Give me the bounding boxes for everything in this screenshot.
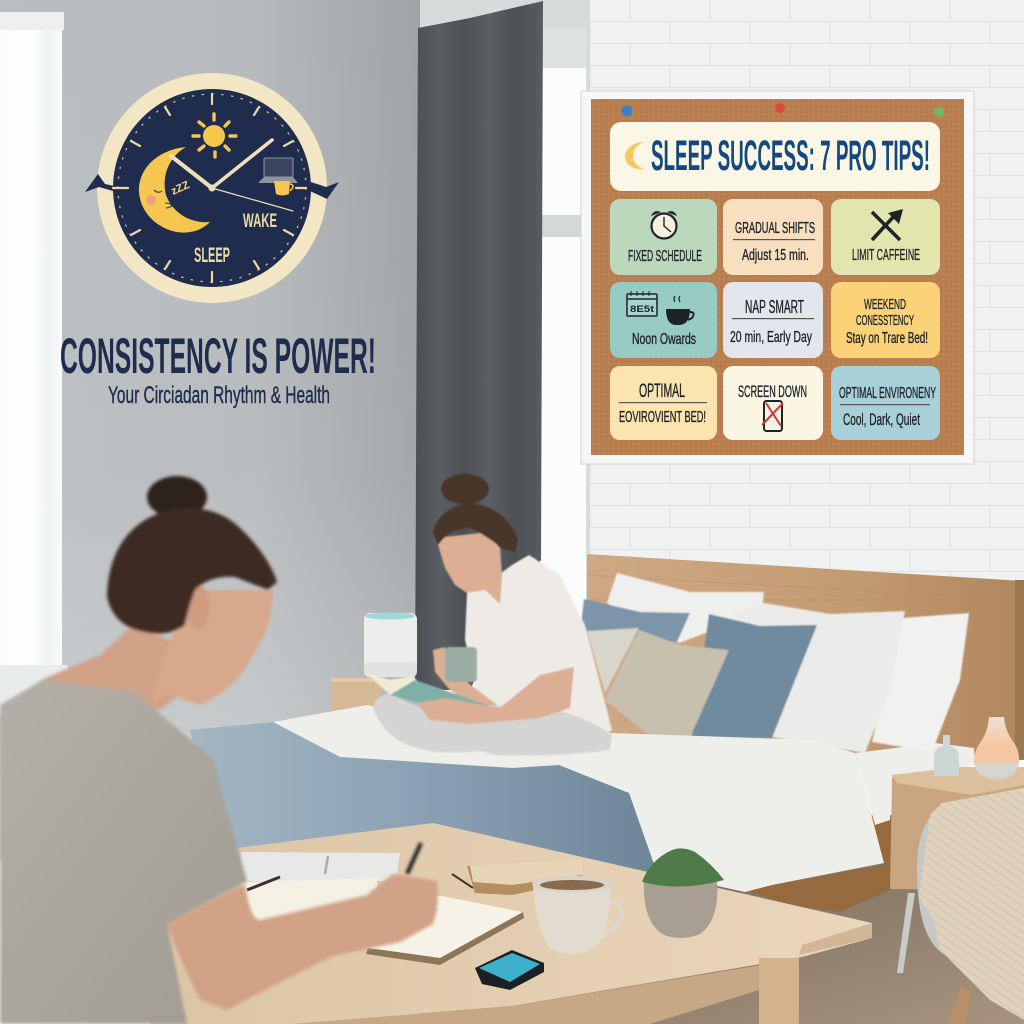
tip: weekend consistency: CONESSTENCY	[856, 312, 914, 329]
hair bun	[147, 476, 207, 518]
tip: limit caffeine: LIMIT CAFFEINE	[852, 247, 920, 264]
woman on bed with book and mug	[365, 474, 612, 755]
smart speaker	[364, 612, 417, 677]
label: wake: WAKE	[243, 211, 277, 232]
tip: nap smart: NAP SMART	[745, 297, 804, 317]
pillows	[580, 573, 969, 753]
tip: weekend consistency: WEEKEND	[864, 296, 906, 313]
icon: crossed-out phone	[762, 401, 783, 431]
clock hands	[171, 140, 293, 211]
arm holding mug	[433, 647, 497, 710]
icon: sun	[193, 114, 236, 157]
patterned pajama pants	[373, 694, 612, 755]
tip: weekend consistency: Stay on Trare Bed!	[846, 330, 928, 347]
mug	[445, 647, 477, 682]
label: sleep: SLEEP	[194, 244, 230, 267]
glass bottle	[934, 735, 959, 776]
smartphone	[475, 950, 544, 990]
tip: noon onwards	[610, 282, 717, 358]
icon: alarm clock	[651, 211, 677, 238]
neck	[43, 625, 187, 710]
coffee mug	[532, 876, 622, 954]
hair bun	[441, 474, 489, 504]
brick wall	[590, 0, 1024, 600]
dark curtain	[415, 1, 543, 690]
writing arm	[167, 874, 438, 1010]
tip: gradual shifts: Adjust 15 min.	[742, 247, 809, 264]
pajama shirt	[465, 555, 612, 738]
woman writing at desk	[0, 476, 438, 1024]
tip: optimal environment: OPTIMAL ENVIRONENY	[839, 385, 936, 402]
face and neck	[436, 533, 502, 604]
tip: fixed schedule	[610, 199, 717, 275]
tip: optimal environment	[831, 366, 940, 440]
corkboard	[581, 91, 974, 464]
mattress sheet	[855, 743, 975, 825]
tip: screen down: SCREEN DOWN	[738, 382, 807, 401]
left nightstand	[331, 678, 381, 716]
infographic scene: CONSISTENCY IS POWER!	[60, 328, 376, 384]
icon: laptop and mug	[258, 158, 298, 196]
papers on desk	[238, 852, 400, 881]
potted succulent	[642, 848, 724, 938]
forearm with hand	[417, 667, 574, 724]
icon: calendar: 8E5t	[630, 304, 654, 314]
tip: noon onwards: Noon Owards	[632, 331, 696, 348]
headboard	[587, 554, 1024, 760]
hair	[433, 503, 518, 552]
tip: optimal bed: EOVIROVIENT BED!	[619, 409, 706, 426]
armchair with knit throw	[897, 788, 1024, 1024]
icon: crossed arrow	[872, 209, 903, 240]
wall clock	[85, 73, 339, 303]
small notebook with pencil	[452, 860, 582, 895]
open notebook	[240, 877, 524, 965]
face	[153, 590, 273, 705]
pen	[407, 843, 421, 874]
white duvet	[273, 705, 884, 892]
right nightstand	[890, 767, 1024, 890]
clock arrows	[85, 174, 339, 199]
tip: optimal environment: Cool, Dark, Quiet	[843, 410, 920, 429]
icon: coffee cup	[666, 296, 694, 325]
wood desk	[150, 823, 872, 1024]
tip: weekend consistency	[831, 282, 940, 358]
pushpins	[622, 103, 944, 117]
tip: gradual shifts	[723, 199, 823, 275]
tip: nap smart	[723, 282, 823, 358]
hair	[107, 508, 277, 634]
icon: sleeping moon	[139, 147, 210, 233]
board title card	[610, 122, 940, 191]
blue throw blanket	[190, 722, 660, 900]
tip: limit caffeine	[831, 199, 940, 275]
ear	[186, 585, 210, 629]
tip: gradual shifts: GRADUAL SHIFTS	[735, 220, 815, 237]
bed	[190, 554, 1024, 912]
tip: fixed schedule: FIXED SCHEDULE	[628, 248, 702, 265]
subheading: Your Circiadan Rhythm & Health	[108, 382, 330, 409]
left grey wall	[0, 0, 420, 860]
upper wall corner	[420, 0, 590, 40]
tip: optimal bed: OPTIMAL	[639, 381, 685, 402]
diffuser vase	[974, 717, 1019, 780]
torso shirt	[0, 679, 247, 1024]
white sheer curtain	[0, 12, 68, 715]
bed frame	[745, 815, 892, 912]
window	[540, 28, 591, 608]
open book	[365, 672, 490, 712]
clock tick marks	[113, 94, 306, 282]
tip: nap smart: 20 min, Early Day	[730, 329, 812, 346]
floor	[420, 850, 1024, 1024]
icon: sleeping moon: zZZ	[169, 179, 192, 198]
tip: screen down	[723, 366, 823, 440]
tip: optimal bed	[610, 366, 717, 440]
